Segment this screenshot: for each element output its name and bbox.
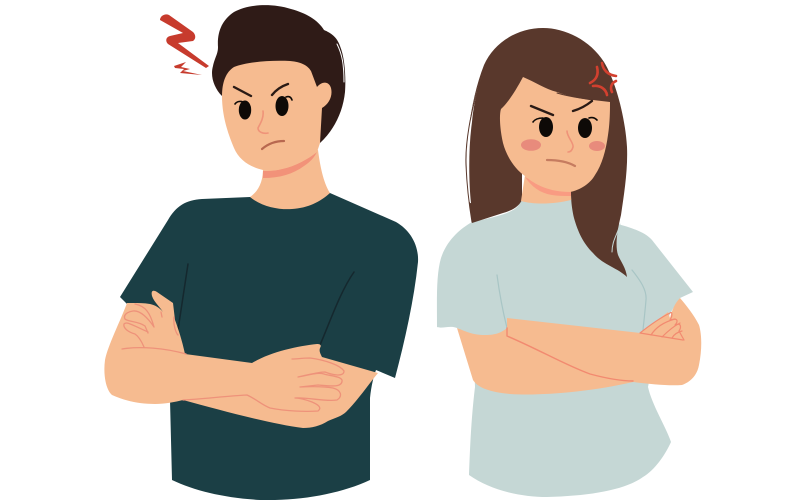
figure: woman: [437, 28, 701, 497]
man hair: [212, 5, 345, 143]
woman hair strand on forehead: [557, 93, 592, 100]
woman neck: [521, 175, 571, 204]
man neck: [250, 150, 330, 209]
man mouth: [262, 141, 284, 149]
man hair highlight: [337, 44, 344, 82]
man face: [222, 61, 332, 171]
man eyes: [239, 96, 288, 120]
figure: man: [104, 5, 418, 500]
woman arm creases: [507, 312, 684, 381]
woman crossed arms: [457, 298, 701, 394]
man shirt: [120, 193, 418, 500]
woman shirt: [437, 200, 693, 497]
woman nose: [567, 131, 573, 152]
woman eyes: [539, 117, 592, 138]
woman hair: [467, 28, 627, 277]
icon: red anger mark: [590, 63, 616, 95]
man eyebrows: [234, 84, 288, 96]
woman hair side strand: [612, 224, 620, 252]
woman cheeks: [521, 139, 605, 151]
woman eyelashes: [533, 118, 597, 122]
man eyelashes: [235, 97, 292, 104]
woman hair outer strand: [466, 72, 483, 222]
man nose: [258, 111, 268, 133]
woman neck shadow: [525, 177, 571, 196]
woman mouth: [547, 160, 575, 166]
man arm creases: [122, 304, 344, 411]
woman shirt folds: [497, 270, 646, 330]
icon: red lightning bolt: [160, 14, 209, 75]
woman eyebrows: [531, 101, 592, 115]
woman face: [500, 77, 610, 192]
man shirt folds: [178, 264, 354, 345]
man crossed arms: [104, 291, 378, 428]
man neck shadow: [263, 152, 317, 178]
woman hair highlight: [467, 73, 483, 203]
